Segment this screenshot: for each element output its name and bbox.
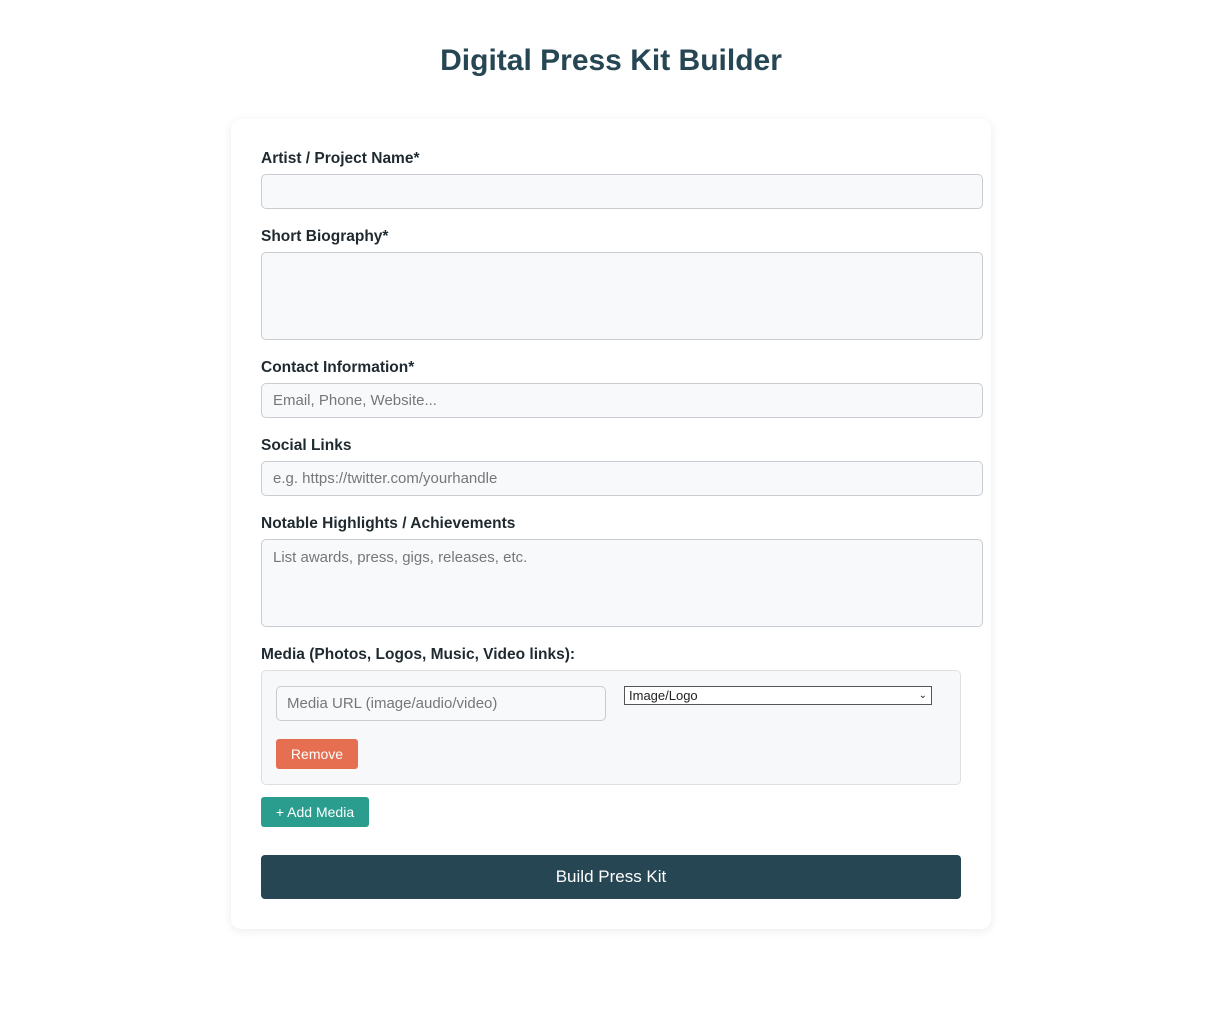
input: media url [276,686,606,721]
select: media type: Image/Logo [629,688,698,703]
button: build press kit [261,855,961,899]
button: build press kit: Build Press Kit [556,867,666,886]
textarea: bio [261,252,983,340]
button: remove [276,739,358,769]
label: name: Artist / Project Name* [261,150,420,167]
label: contact: Contact Information* [261,359,414,376]
input: social [261,461,983,496]
label: bio: Short Biography* [261,228,388,245]
button: add media [261,797,369,827]
textarea: highlights: List awards, press, gigs, releases, etc. [273,549,527,566]
input: contact [261,383,983,418]
label: social: Social Links [261,437,351,454]
select: media type [624,686,932,705]
input: social: e.g. https://twitter.com/yourhandle [273,470,497,487]
panel: form card [231,119,991,929]
input: contact: Email, Phone, Website... [273,392,437,409]
button: remove: Remove [291,746,343,762]
title: Digital Press Kit Builder [440,44,782,77]
input: media url: Media URL (image/audio/video) [287,695,497,712]
select: media type: ⌄ [919,690,927,701]
input: name [261,174,983,209]
textarea: highlights [261,539,983,627]
label: media: Media (Photos, Logos, Music, Video links): [261,646,575,663]
panel: media item [261,670,961,785]
button: add media: + Add Media [276,804,354,820]
label: highlights: Notable Highlights / Achievements [261,515,515,532]
